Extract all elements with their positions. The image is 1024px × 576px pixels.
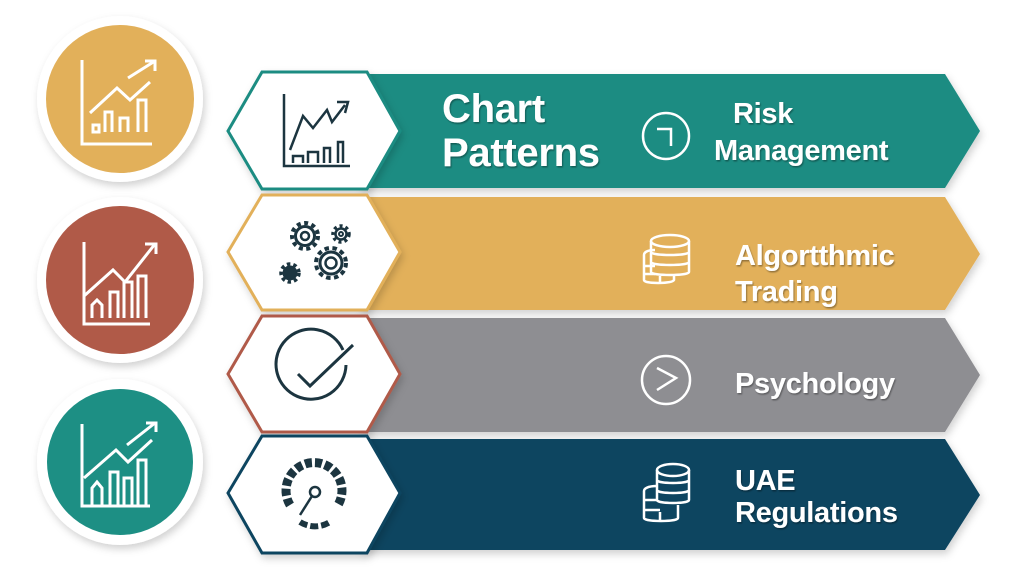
band: navy UAE Regulations (360, 439, 980, 550)
label: Algortthmic Trading: Algortthmic (735, 240, 895, 272)
hexagon: chart patterns icon (228, 72, 400, 189)
label: UAE Regulations: Regulations (735, 497, 898, 529)
label: UAE Regulations: UAE (735, 465, 795, 497)
circle: gold chart (37, 16, 203, 182)
hexagon: gears icon (228, 195, 400, 310)
label: Algortthmic Trading: Trading (735, 276, 838, 308)
hexagon: gauge icon (228, 436, 400, 553)
hexagon: checkmark icon (228, 316, 400, 432)
heading: Chart Patterns (442, 87, 600, 175)
label: Risk Management: Management (714, 135, 889, 167)
icon: chevron circle (642, 356, 690, 404)
icon: database stack (644, 464, 689, 522)
label: Psychology: Psychology (735, 368, 895, 400)
label: UAE Regulations (735, 465, 898, 529)
circle: teal chart (37, 379, 203, 545)
circle: red chart (37, 197, 203, 363)
label: Risk Management: Risk (733, 98, 794, 130)
icon: database stack (644, 235, 689, 284)
band: gray Psychology (360, 318, 980, 432)
label: Algortthmic Trading (735, 240, 895, 308)
label: Risk Management (714, 98, 889, 167)
band: gold Algorithmic Trading (360, 197, 980, 310)
heading: Chart Patterns: Patterns (442, 131, 600, 175)
icon: clock circle (643, 113, 689, 159)
band: teal Chart Patterns / Risk Management (360, 74, 980, 188)
heading: Chart Patterns: Chart (442, 87, 545, 131)
